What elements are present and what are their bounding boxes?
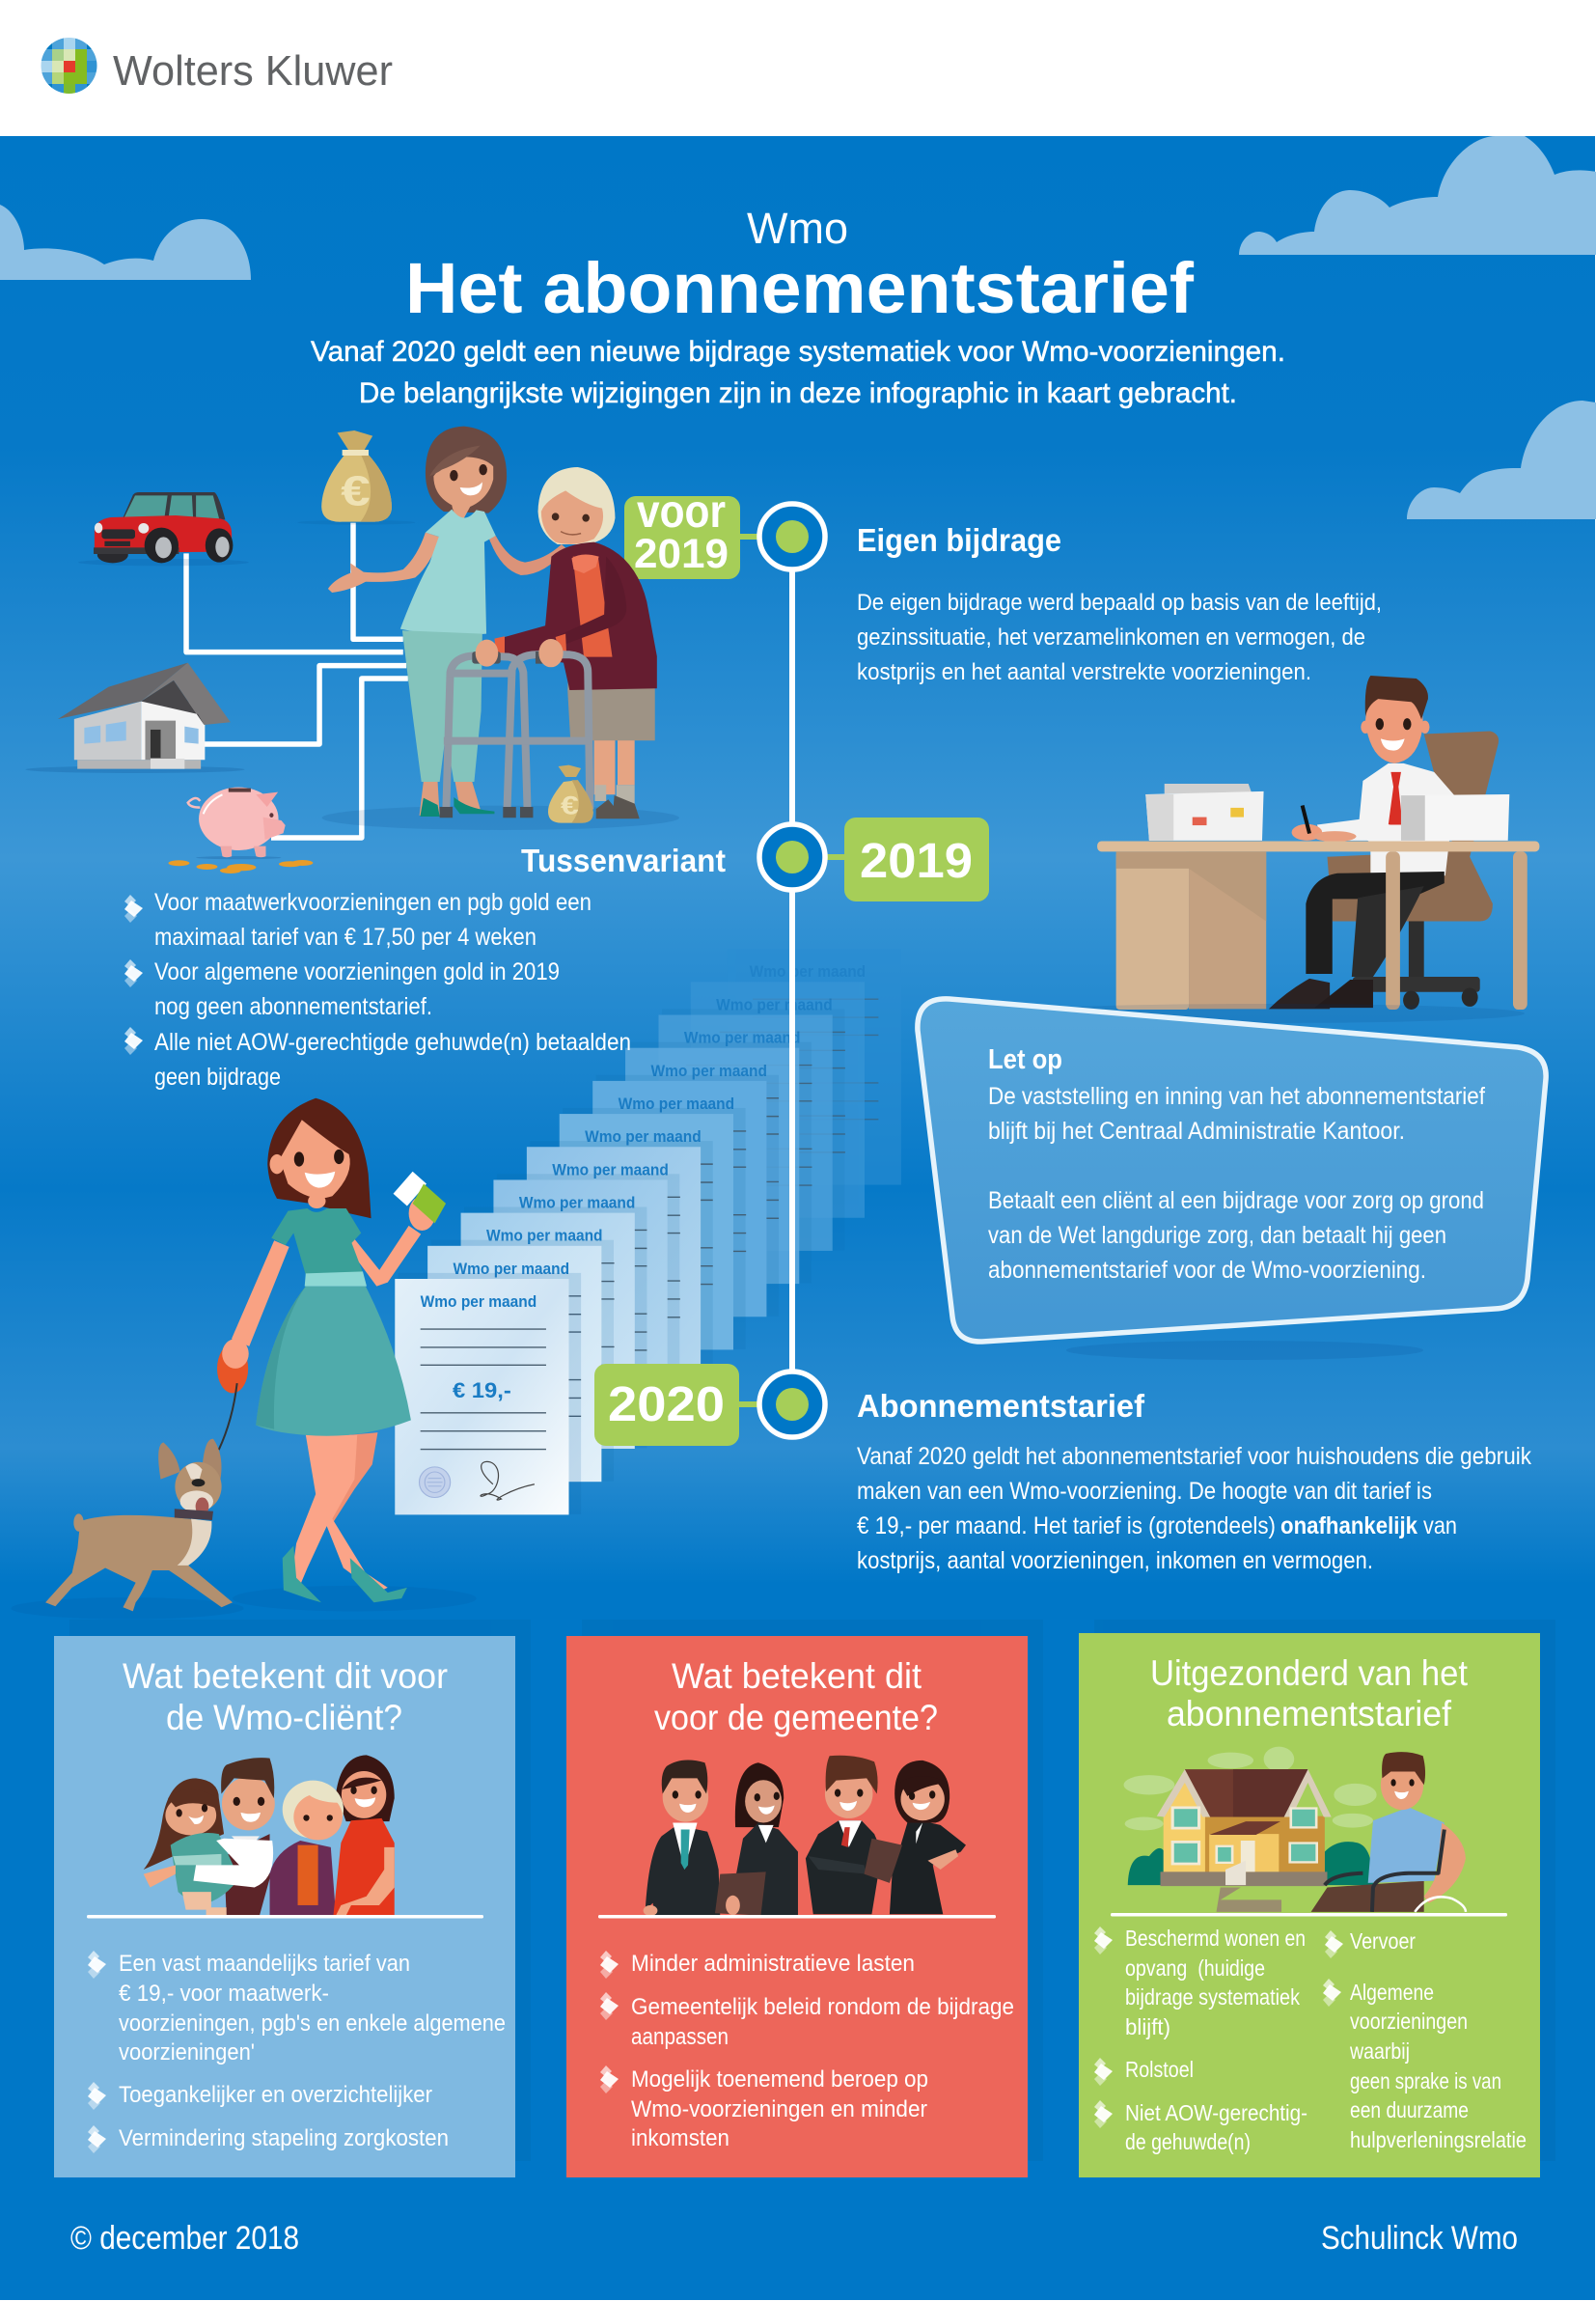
node 2020 [739,1372,825,1437]
bullet list: geen bijdrage [154,1064,281,1091]
body text: maken van een Wmo-voorziening. De hoogte van dit tarief is [857,1478,1432,1505]
callout text: abonnementstarief voor de Wmo-voorziening. [988,1257,1426,1284]
bullet list right: een duurzame [1350,2097,1469,2122]
panel heading: Wat betekent dit voor [123,1656,448,1696]
bullet list: voorzieningen' [119,2039,255,2065]
subtitle: Vanaf 2020 geldt een nieuwe bijdrage systematiek voor Wmo-voorzieningen. [311,336,1285,368]
bullet list right: waarbij [1349,2038,1410,2064]
office chair [1327,732,1499,1010]
main title: Het abonnementstarief [405,248,1194,328]
illustration: office worker at desk [1097,676,1539,1010]
bullet list right: Algemene [1350,1980,1434,2005]
panel: uitgezonderd [1079,1633,1540,2177]
badge 2020 [594,1364,739,1446]
figure: elderly client [494,467,657,818]
divider [598,1915,996,1919]
badge 2019: 2019 [860,833,973,888]
icon: car [78,492,249,566]
bullet list left: blijft) [1125,2014,1170,2039]
logo wordmark: Wolters Kluwer [113,47,393,95]
body text: Vanaf 2020 geldt het abonnementstarief voor huishoudens die gebruik [857,1443,1531,1470]
section: Tussenvariant: Tussenvariant [521,843,726,878]
bullet list: € 19,- voor maatwerk- [119,1981,329,2007]
bullet list right: Vervoer [1350,1928,1416,1954]
document stack: Wmo per maand: Wmo per maand [585,1127,702,1146]
bullet list left: Niet AOW-gerechtig- [1125,2100,1307,2125]
badge 2019 [844,818,989,901]
body text: € 19,- per maand. Het tarief is (grotendeels) [857,1512,1276,1539]
dog leash [219,1383,237,1450]
logo mosaic icon [41,38,98,96]
bullet list right: hulpverleningsrelatie [1350,2127,1527,2152]
node 2019 [759,824,844,890]
connector lines [186,523,408,838]
bullet list right: geen sprake is van [1350,2068,1501,2093]
callout: Let op [918,999,1546,1342]
document stack: Wmo per maand: Wmo per maand [650,1062,767,1080]
bullet list: Vermindering stapeling zorgkosten [119,2125,449,2151]
badge voor 2019: 2019 [634,531,729,577]
panel shadows [69,1620,1555,2161]
illustration: business people [644,1756,966,1916]
callout text: De vaststelling en inning van het abonnementstarief [988,1083,1485,1110]
panel heading: voor de gemeente? [654,1698,938,1737]
bullet list: Toegankelijker en overzichtelijker [119,2082,432,2108]
body text: onafhankelijk [1280,1512,1417,1539]
bullet list: Voor maatwerkvoorzieningen en pgb gold een [154,889,592,916]
document stack: Wmo per maand: Wmo per maand [619,1095,734,1113]
badge voor 2019 [624,486,740,579]
back documents: Wmo per maand [750,962,866,981]
bullet list: aanpassen [631,2024,729,2050]
body text: kostprijs en het aantal verstrekte voorzieningen. [857,659,1311,685]
panel heading [123,1656,448,1737]
bullet list left: opvang (huidige [1125,1955,1265,1981]
bullet list: inkomsten [631,2125,729,2151]
walker frame [440,639,590,818]
panel heading: de Wmo-cliënt? [166,1698,402,1737]
shadow under figures [322,806,679,830]
subtitle: De belangrijkste wijzigingen zijn in deze infographic in kaart gebracht. [359,377,1237,409]
section: Eigen bijdrage: Eigen bijdrage [857,522,1061,558]
icon: house [25,663,245,773]
desk with paper stacks [1097,784,1539,1010]
badge 2020: 2020 [608,1376,725,1431]
subtitle [311,336,1285,409]
illustration: assets linked to nurse and client [25,427,679,873]
figure: dog [45,1439,233,1611]
panel heading: Uitgezonderd van het [1150,1653,1469,1693]
cloud top right [1239,136,1596,255]
middle documents: Wmo per maand [552,1160,669,1178]
body text [857,590,1382,685]
stamp [420,1467,451,1498]
bullet list: Mogelijk toenemend beroep op [631,2066,928,2093]
header logo: Wolters Kluwer [41,38,393,96]
bullet list [600,1951,1014,2151]
callout text: blijft bij het Centraal Administratie Kantoor. [988,1118,1405,1145]
vertical line [789,537,795,1405]
divider [87,1915,483,1919]
panel: Wmo-client [54,1636,515,2177]
bullet list: nog geen abonnementstarief. [154,993,432,1020]
document stack: Wmo per maand: Wmo per maand [716,995,833,1013]
document stack: Wmo per maand [395,949,901,1514]
icon: small money bag: € [561,791,579,819]
node voor 2019 [740,504,825,569]
bullet list [88,1951,506,2153]
document stack: Wmo per maand: Wmo per maand [519,1193,635,1211]
icon: piggy bank [188,788,286,859]
illustration: woman walking dog [11,1098,477,1620]
section: Abonnementstarief: Abonnementstarief [857,1388,1145,1424]
front document [395,1273,581,1514]
figure: nurse [328,427,566,817]
signature [481,1461,535,1500]
bullet list: Alle niet AOW-gerechtigde gehuwde(n) betaalden [154,1029,631,1056]
footer right: source: Schulinck Wmo [1321,2220,1518,2257]
front document: Wmo per maand [421,1292,537,1311]
callout text: van de Wet langdurige zorg, dan betaalt hij geen [988,1222,1446,1249]
cloud top left [0,205,251,280]
icon: money bag [297,430,415,525]
footer left: date: © december 2018 [70,2220,299,2257]
bullet list right: voorzieningen [1350,2009,1468,2034]
illustration: family [144,1755,395,1916]
bullet list right [1323,1928,1527,2152]
icon: small money bag [548,765,593,823]
bullet list left: Beschermd wonen en [1125,1926,1306,1951]
desk shadow [1004,1004,1525,1023]
panel heading: Wat betekent dit [672,1656,922,1696]
illustration: house and wheelchair user [1124,1747,1466,1912]
panel: gemeente [566,1636,1028,2177]
section: Abonnementstarief [857,1388,1531,1574]
body text [857,1443,1531,1574]
title block [311,204,1285,409]
section: Eigen bijdrage [857,522,1382,685]
kicker Wmo: Wmo [747,204,848,253]
bullet list left: Rolstoel [1125,2057,1194,2082]
ground shadows [11,1586,477,1620]
middle documents [527,1141,713,1383]
bullet list left [1094,1926,1307,2154]
bullet list: Wmo-voorzieningen en minder [631,2096,927,2122]
panel heading [1150,1653,1469,1733]
section: Tussenvariant [124,843,726,1091]
bullet list: voorzieningen, pgb's en enkele algemene [119,2010,506,2037]
bullet list: Een vast maandelijks tarief van [119,1951,410,1977]
divider [1111,1913,1507,1917]
figure: woman [217,1098,446,1602]
callout text [988,1083,1485,1284]
bullet list left: bijdrage systematiek [1125,1984,1300,2010]
bullet list [124,889,631,1091]
document stack: Wmo per maand: Wmo per maand [454,1260,569,1278]
document stack: Wmo per maand: Wmo per maand [684,1029,800,1046]
icon: coins [168,860,313,873]
badge voor 2019: voor [637,486,726,538]
back documents [728,949,901,1185]
icon: money bag: € [341,468,371,514]
figure: office worker [1269,676,1454,1009]
body text: gezinssituatie, het verzamelinkomen en vermogen, de [857,624,1365,651]
bullet list: Voor algemene voorzieningen gold in 2019 [154,958,560,985]
callout shadow [1066,1341,1423,1360]
bullet list: Minder administratieve lasten [631,1951,915,1977]
document stack: Wmo per maand: Wmo per maand [486,1227,603,1244]
body text: van [1423,1512,1457,1539]
timeline [739,504,844,1437]
bullet list left: de gehuwde(n) [1125,2129,1251,2154]
panel heading [654,1656,938,1737]
bullet list: Gemeentelijk beleid rondom de bijdrage [631,1994,1014,2020]
callout heading: Let op [988,1044,1062,1075]
panel heading: abonnementstarief [1167,1694,1452,1733]
amount: € 19,- [453,1378,511,1403]
callout text: Betaalt een cliënt al een bijdrage voor zorg op grond [988,1187,1484,1214]
bullet list: maximaal tarief van € 17,50 per 4 weken [154,924,537,951]
body text: kostprijs, aantal voorzieningen, inkomen en vermogen. [857,1547,1373,1574]
body text: De eigen bijdrage werd bepaald op basis van de leeftijd, [857,590,1382,616]
cloud right [1407,401,1596,519]
